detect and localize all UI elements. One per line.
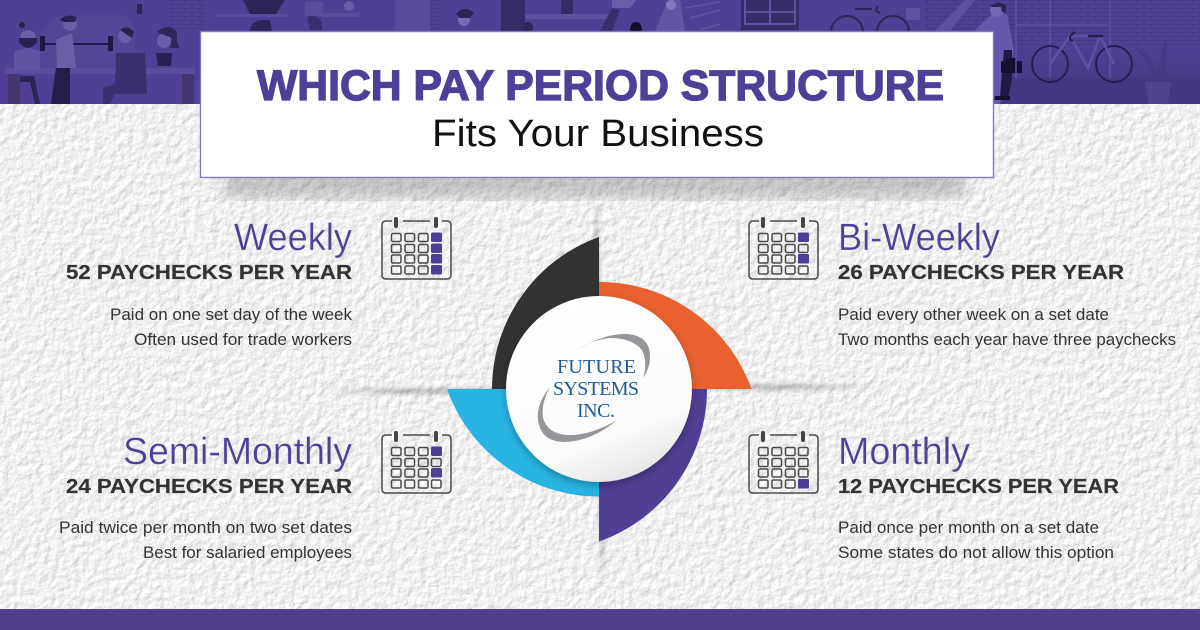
plant in pot — [1133, 36, 1171, 104]
footer bar — [0, 609, 1200, 630]
logo swoosh top — [577, 334, 650, 378]
panel: monthly: Paid once per month on a set date — [838, 519, 1099, 537]
pinwheel quarter segments — [447, 237, 752, 542]
header illustration band — [0, 0, 1200, 104]
logo wordmark: INC. — [577, 400, 615, 422]
panel: semi-monthly: Paid twice per month on two set dates — [59, 519, 352, 537]
panel: bi-weekly: Paid every other week on a set date — [838, 306, 1109, 324]
segment: purple — [599, 389, 707, 542]
icon: bi-weekly calendar — [749, 217, 818, 279]
panel: monthly: Some states do not allow this option — [838, 544, 1114, 562]
heading line 1: WHICH PAY PERIOD STRUCTURE — [257, 62, 944, 110]
icon: weekly calendar — [382, 217, 451, 279]
office scene, left — [5, 4, 195, 104]
panel: bi-weekly: 26 PAYCHECKS PER YEAR — [838, 262, 1125, 284]
panel: bi-weekly: Two months each year have three paychecks — [838, 331, 1176, 349]
fold creases — [320, 195, 880, 585]
panel: weekly: Paid on one set day of the week — [110, 306, 353, 324]
logo wordmark — [553, 356, 639, 422]
segment: orange — [599, 282, 752, 389]
panel: semi-monthly: 24 PAYCHECKS PER YEAR — [66, 476, 353, 498]
panel: weekly: Often used for trade workers — [134, 331, 352, 349]
center logo disc — [506, 296, 692, 482]
title box shadow — [225, 170, 965, 198]
office scene, top centre — [215, 0, 799, 32]
segment: cyan — [447, 389, 599, 496]
window frames and bicycle — [1016, 0, 1132, 82]
man with briefcase — [975, 3, 1022, 104]
heading line 2: Fits Your Business — [432, 113, 764, 155]
panel: weekly: 52 PAYCHECKS PER YEAR — [66, 262, 353, 284]
panel: monthly — [838, 431, 1120, 562]
icon: monthly calendar — [749, 431, 818, 493]
panel: weekly: Weekly — [234, 217, 352, 259]
bicycle, top right of box — [831, 6, 909, 48]
title box — [200, 32, 994, 178]
panel: semi-monthly: Best for salaried employees — [143, 544, 352, 562]
segment: black — [492, 237, 599, 389]
logo wordmark: SYSTEMS — [553, 378, 639, 400]
panel: weekly — [66, 217, 353, 349]
panel: bi-weekly — [838, 217, 1176, 349]
icon: semi-monthly calendar — [382, 431, 451, 493]
panel: monthly: 12 PAYCHECKS PER YEAR — [838, 476, 1120, 498]
panel: monthly: Monthly — [838, 431, 970, 473]
logo wordmark: FUTURE — [557, 356, 636, 378]
logo swoosh bottom — [538, 387, 617, 442]
panel: bi-weekly: Bi-Weekly — [838, 217, 1000, 259]
panel: semi-monthly — [59, 431, 353, 562]
panel: semi-monthly: Semi-Monthly — [123, 431, 352, 473]
